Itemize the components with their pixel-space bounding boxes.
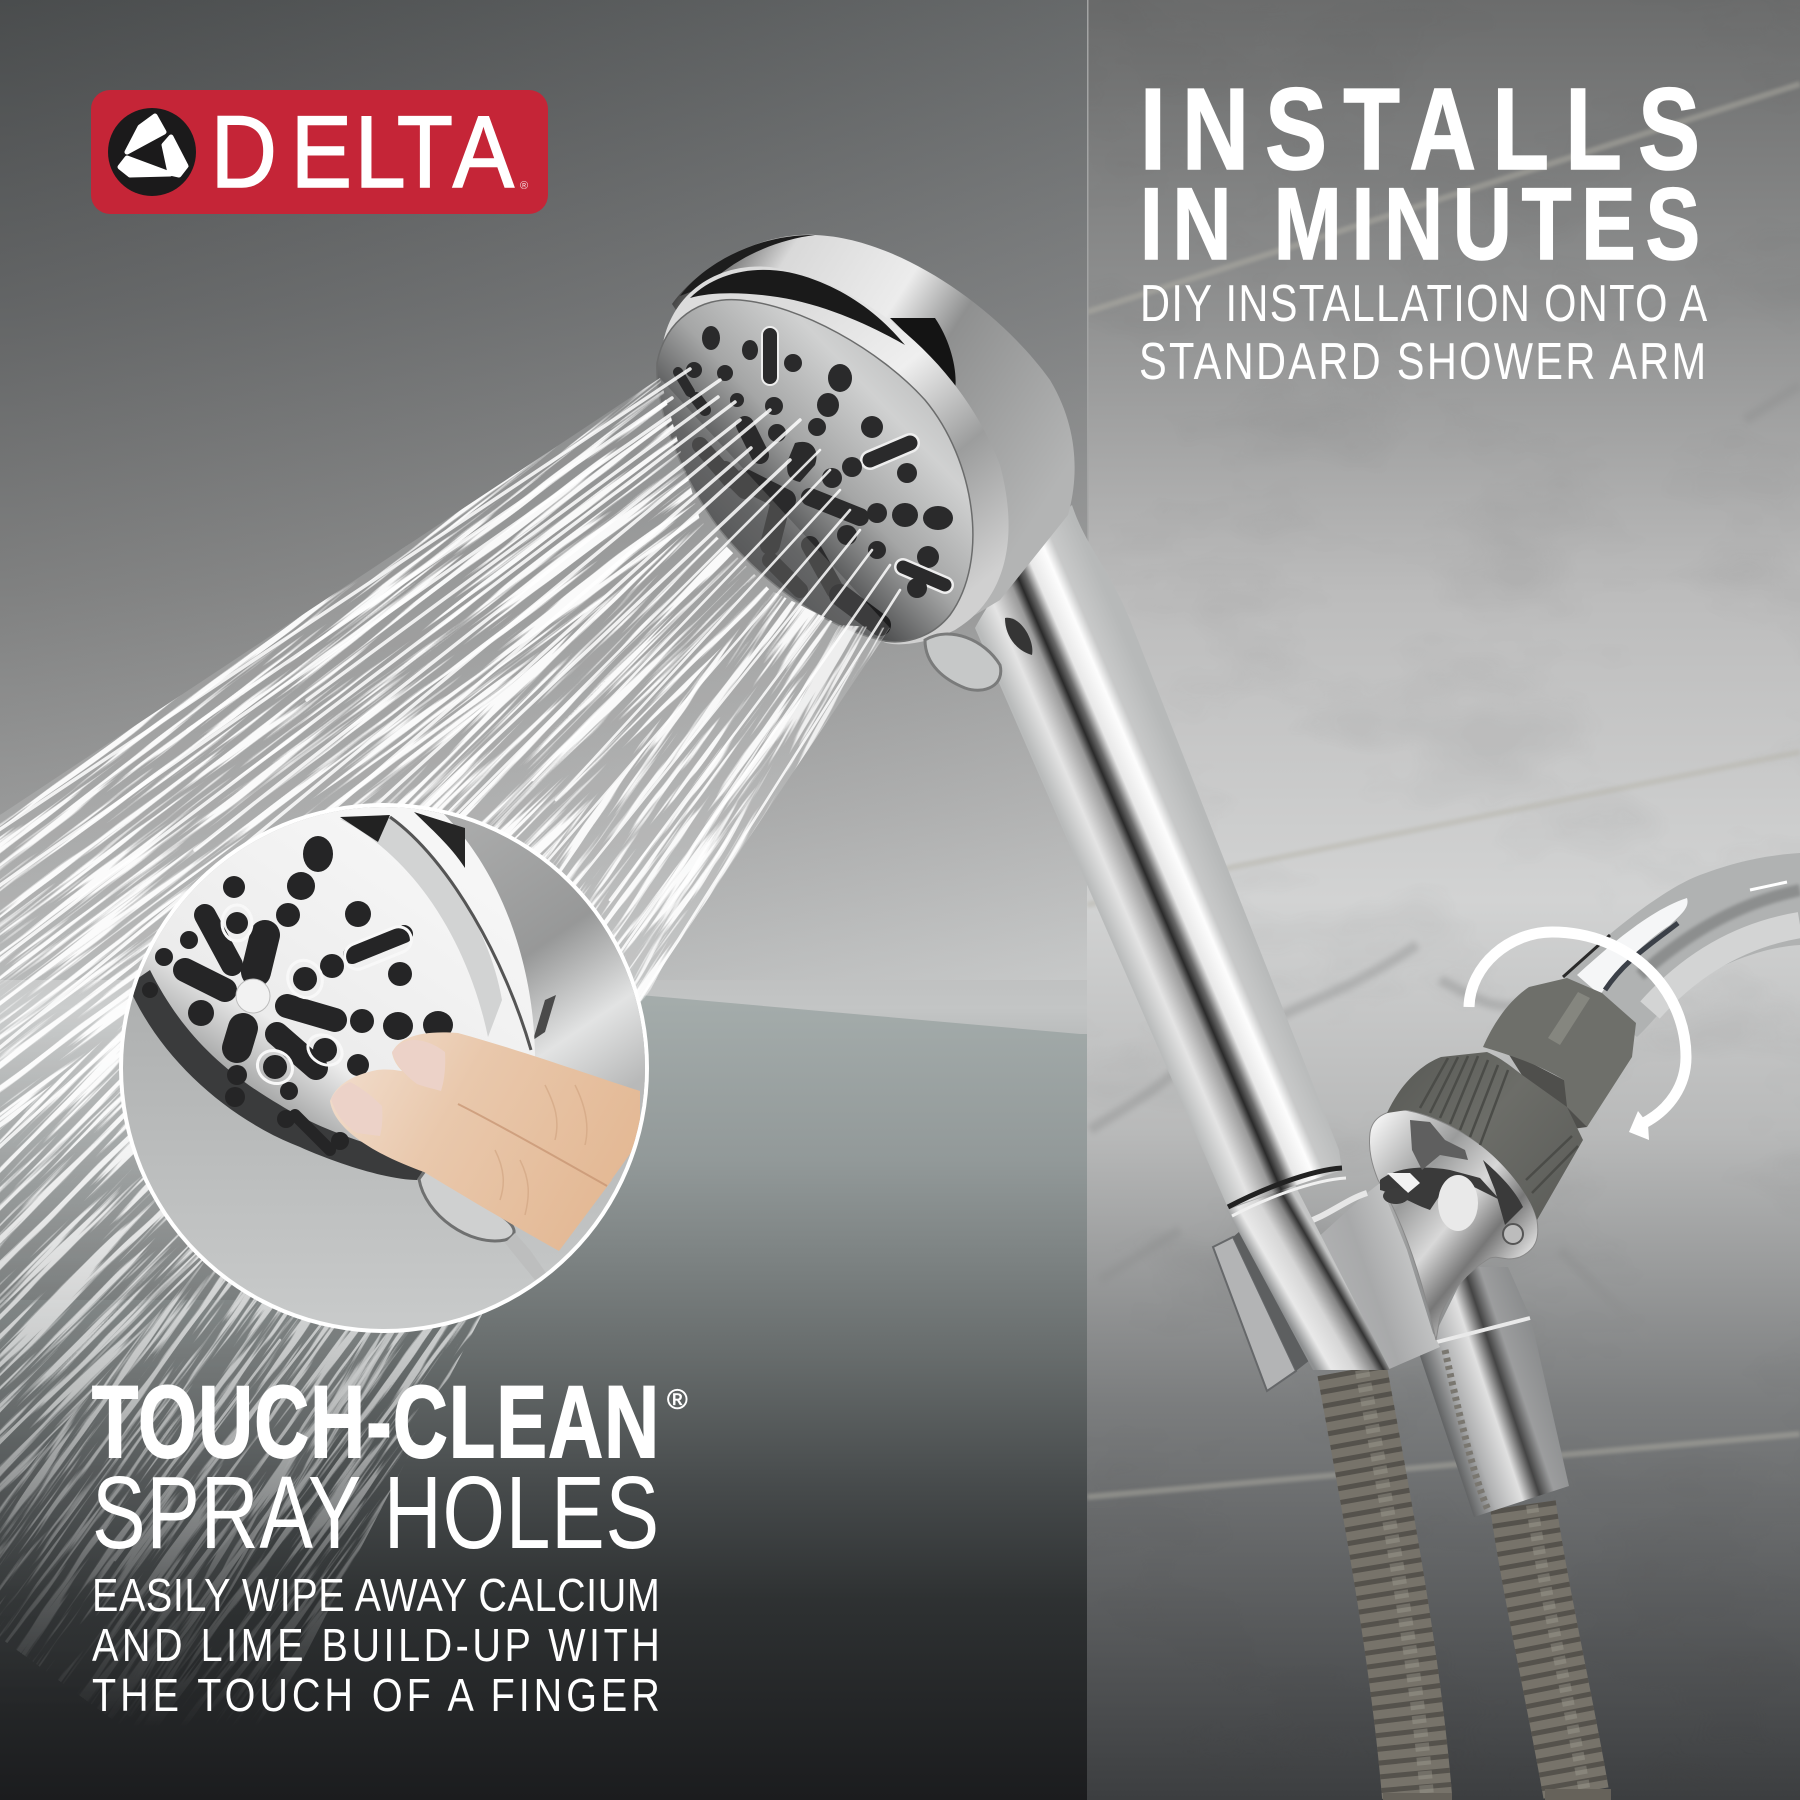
logo badge xyxy=(91,90,548,214)
body text: wipe away calcium: THE TOUCH OF A FINGER xyxy=(92,1670,660,1722)
heading: touch-clean: ® xyxy=(667,1384,688,1415)
grey adjustment nut: small xyxy=(1483,978,1636,1127)
hand shower handle xyxy=(975,505,1346,1216)
subtext: DIY installation: STANDARD SHOWER ARM xyxy=(1139,332,1706,390)
inset white ring and backdrop xyxy=(119,803,649,1333)
swivel highlights xyxy=(1380,1120,1523,1244)
swivel ball joint xyxy=(1369,1110,1538,1340)
logo wordmark: DELTA xyxy=(211,94,514,209)
bracket back fin xyxy=(1213,1226,1310,1391)
spray face xyxy=(657,300,973,642)
shower head rim xyxy=(662,267,1009,644)
handle lower tube xyxy=(1227,1185,1390,1370)
background: left wall light falloff xyxy=(0,0,1087,980)
subtext: DIY installation xyxy=(1139,274,1708,390)
bracket support tube xyxy=(1419,1267,1569,1517)
background: right marble wall xyxy=(1087,0,1800,1800)
hose-neck trigger button xyxy=(925,634,1001,690)
logo white triangle lobes xyxy=(120,116,186,175)
heading: touch-clean: TOUCH-CLEAN xyxy=(92,1366,659,1480)
shell dark top edge xyxy=(680,235,815,296)
shell black reflection xyxy=(890,318,956,390)
shower arm xyxy=(1563,853,1800,1037)
rotation arrow xyxy=(1469,932,1686,1140)
subtext: DIY installation: DIY INSTALLATION ONTO A xyxy=(1140,274,1708,332)
rim black band xyxy=(690,270,905,345)
logo red rounded rectangle xyxy=(91,90,548,214)
heading: installs in minutes xyxy=(1140,65,1700,281)
water spray xyxy=(0,367,902,1704)
body text: wipe away calcium: AND LIME BUILD-UP WITH xyxy=(92,1620,660,1672)
shower head back shell xyxy=(672,235,1075,630)
logo black circle mark xyxy=(108,108,196,196)
grey adjustment nut: large xyxy=(1387,1052,1583,1220)
logo registered mark: ® xyxy=(520,180,528,192)
body text: wipe away calcium: EASILY WIPE AWAY CALCIUM xyxy=(92,1570,660,1622)
body text: wipe away calcium xyxy=(92,1570,660,1722)
spray holes xyxy=(678,326,953,625)
heading: installs in minutes: IN MINUTES xyxy=(1140,166,1700,281)
heading: installs in minutes: INSTALLS xyxy=(1140,65,1700,194)
neck cut-out detail xyxy=(1005,618,1032,655)
grey adjustment collar xyxy=(1506,1050,1587,1130)
detail inset: touch-clean spray holes xyxy=(119,800,660,1333)
heading: spray holes: SPRAY HOLES xyxy=(92,1454,659,1570)
background: glass shelf panel xyxy=(0,995,1087,1800)
background: left wall xyxy=(0,0,1087,1800)
inset contents xyxy=(119,800,660,1333)
hand shower hose xyxy=(1352,1370,1452,1800)
wall bracket hose xyxy=(1523,1505,1611,1800)
bracket clip body xyxy=(1293,1183,1440,1370)
